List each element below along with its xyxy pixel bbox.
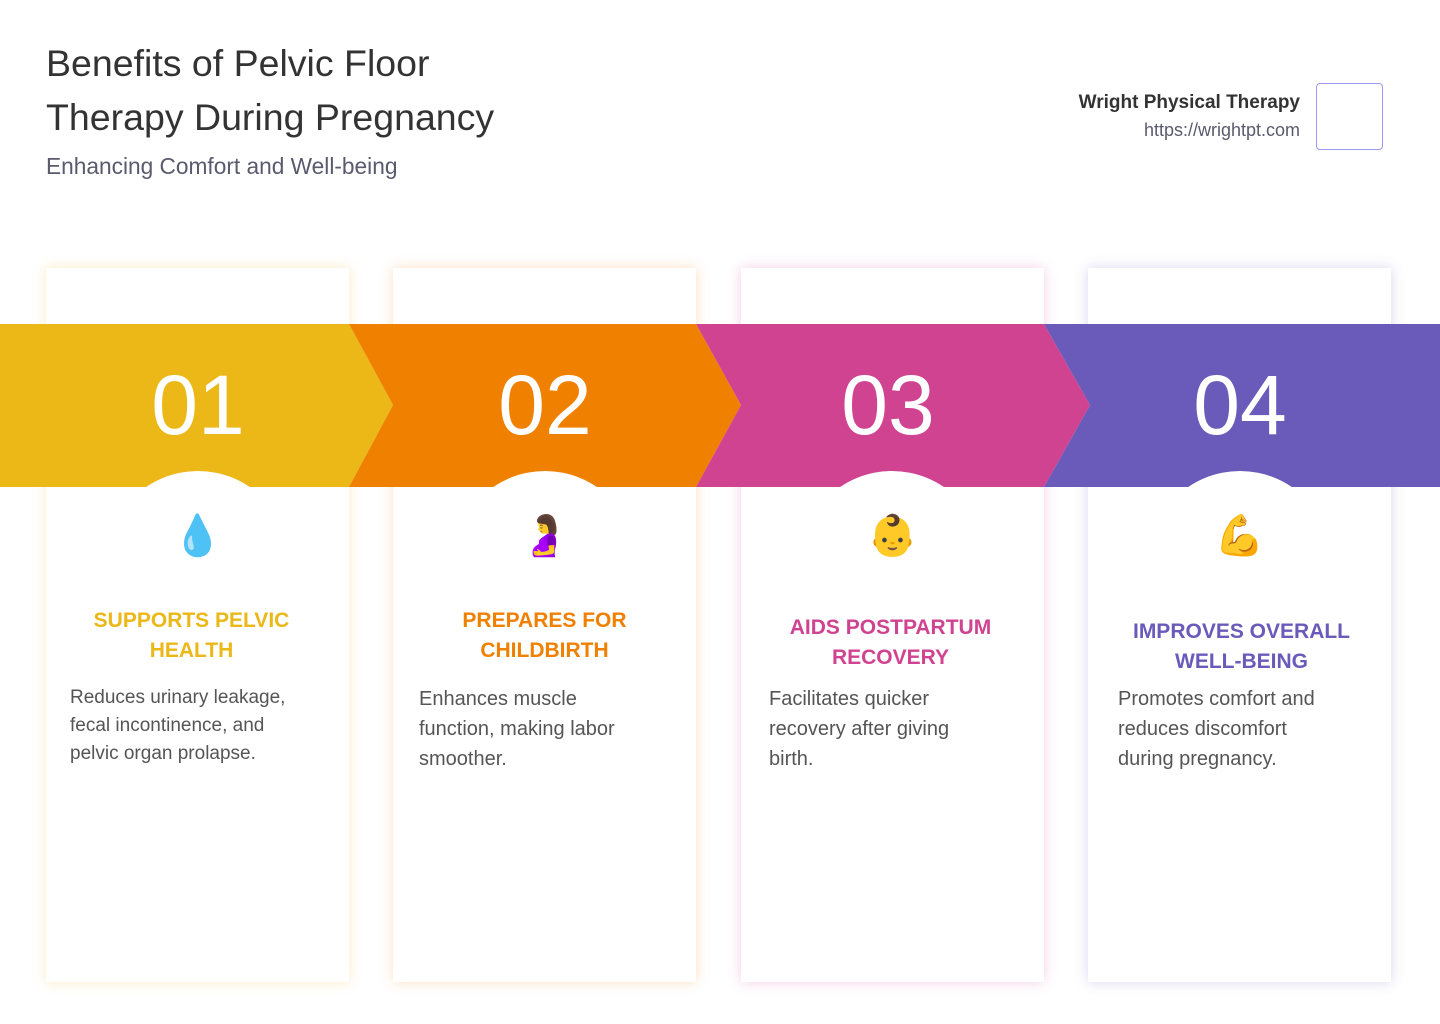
text 2: smoother. [419,748,507,770]
text 4: reduces discomfort [1118,718,1287,740]
icon: flexed biceps: 💪 [1215,512,1264,559]
numbers: 04 [1193,358,1287,452]
arrow 2 [349,324,741,487]
numbers: 01 [151,358,245,452]
card 4 [1088,268,1391,982]
icon: pregnant woman: 🤰 [520,512,569,559]
heading 3: RECOVERY [832,646,949,669]
numbers [151,358,1287,452]
arrow 1 [0,324,393,487]
text 2: function, making labor [419,718,615,740]
text 2 [419,688,615,770]
card 2 [393,268,696,982]
heading 3 [790,616,991,669]
brand block: https://wrightpt.com [1144,120,1300,140]
text 1: Reduces urinary leakage, [70,687,285,708]
panel 1 content [70,512,289,764]
text 4: Promotes comfort and [1118,688,1315,710]
brand block [1078,92,1300,140]
heading 2: CHILDBIRTH [480,639,609,662]
text 4: during pregnancy. [1118,748,1277,770]
heading 3: AIDS POSTPARTUM [790,616,991,639]
icon: water drop: 💧 [173,512,222,559]
heading 1: HEALTH [150,639,233,662]
heading 4: IMPROVES OVERALL [1133,620,1350,643]
subtitle: Enhancing Comfort and Well-being [46,153,397,179]
text 4 [1118,688,1315,770]
icon: baby: 👶 [868,512,917,559]
heading 1: SUPPORTS PELVIC [94,609,289,632]
heading 2 [462,609,627,662]
logo box [1316,83,1383,150]
numbers: 03 [841,358,935,452]
title: Therapy During Pregnancy [46,96,494,138]
numbers: 02 [498,358,592,452]
heading 4 [1133,620,1350,673]
text 1: fecal incontinence, and [70,715,264,736]
card 3 [741,268,1044,982]
text 1 [70,687,285,764]
heading 4: WELL-BEING [1175,650,1308,673]
heading 1 [94,609,289,662]
card 1 [46,268,349,982]
panel 2 content [419,512,627,770]
text 2: Enhances muscle [419,688,577,710]
panel 3 content [769,512,991,770]
panel 4 content [1118,512,1350,770]
arrow 4 [1044,324,1440,487]
heading 2: PREPARES FOR [462,609,627,632]
title: Benefits of Pelvic Floor [46,42,430,84]
brand block: Wright Physical Therapy [1079,92,1300,113]
text 1: pelvic organ prolapse. [70,743,256,764]
text 3: recovery after giving [769,718,949,740]
text 3: birth. [769,748,813,770]
text 3 [769,688,949,770]
arrow 3 [696,324,1090,487]
title [46,42,494,138]
text 3: Facilitates quicker [769,688,929,710]
